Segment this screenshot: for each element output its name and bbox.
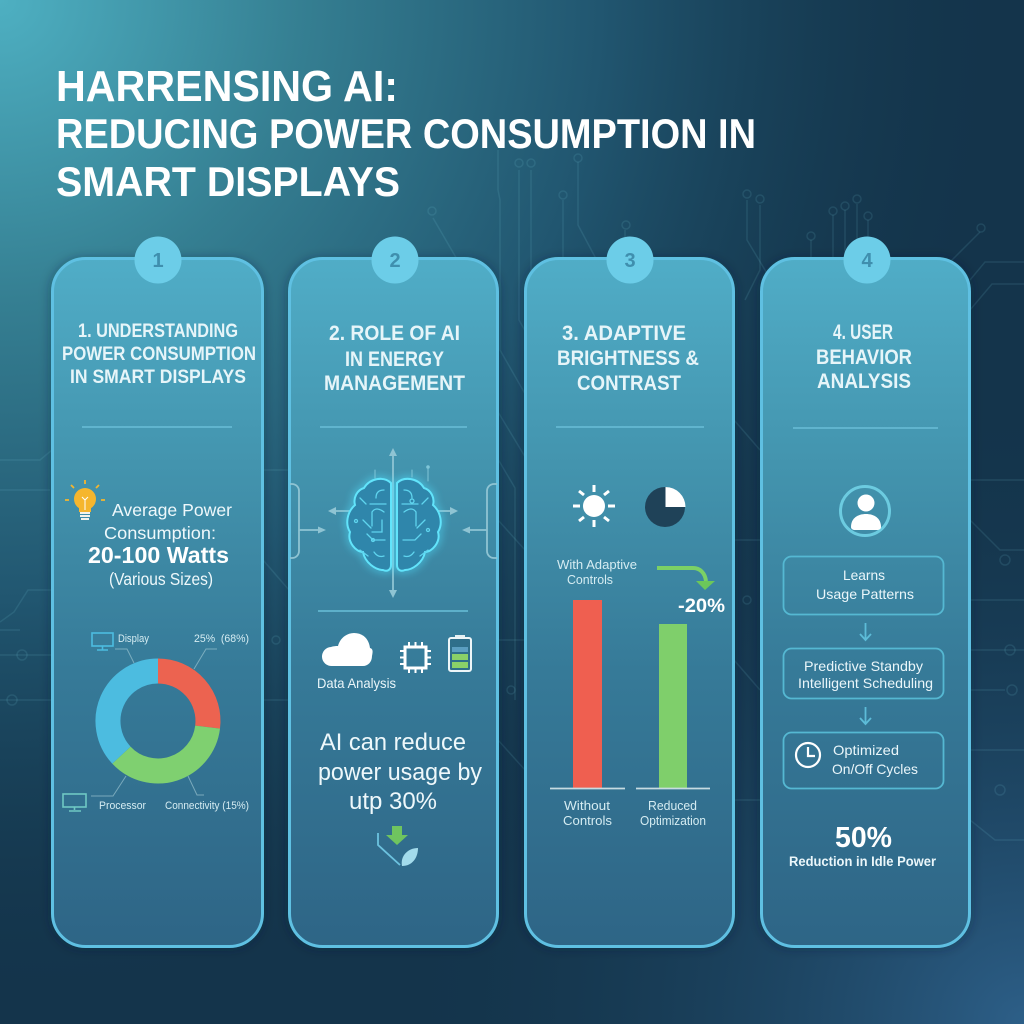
50 percent statistic: Reduction in Idle Power (789, 854, 937, 869)
50 percent statistic: 50% (835, 822, 892, 854)
arrow down (860, 707, 871, 724)
step number 4 (844, 236, 890, 284)
icon: arrow and leaf (378, 826, 418, 866)
heading 2: 2. ROLE OF AI (329, 322, 460, 345)
donut labels and icons: Connectivity (15%) (165, 800, 249, 812)
average power text: Average Power (112, 500, 232, 520)
heading 4: ANALYSIS (817, 370, 911, 393)
icon: sun (573, 485, 615, 527)
panel 3: adaptive brightness (525, 236, 734, 947)
box: predictive standby: Predictive Standby (804, 658, 923, 674)
step number 2: 2 (389, 250, 401, 272)
donut labels and icons (63, 633, 249, 812)
heading 4: BEHAVIOR (816, 346, 912, 369)
step number 3: 3 (624, 250, 636, 272)
box: learns usage patterns (784, 556, 944, 614)
average power text (88, 500, 232, 589)
title: REDUCING POWER CONSUMPTION IN (56, 110, 756, 157)
donut labels and icons: 25% (68%) (194, 633, 249, 645)
box: optimized cycles: Optimized (833, 742, 899, 758)
50 percent statistic (789, 822, 937, 869)
icon: chip (400, 642, 431, 673)
box: predictive standby: Intelligent Scheduling (798, 675, 933, 691)
icon: cloud (322, 633, 373, 666)
step number 2 (372, 236, 418, 284)
icon: user (840, 486, 890, 536)
bar labels: Controls (563, 813, 612, 828)
box: predictive standby (784, 648, 944, 698)
AI reduction statement: power usage by (318, 759, 482, 786)
icon: light bulb (65, 480, 105, 519)
box: optimized cycles (784, 732, 944, 788)
bar labels: Optimization (640, 813, 706, 828)
heading 1 (62, 321, 256, 388)
heading 4: 4. USER (833, 321, 893, 344)
AI reduction statement: utp 30% (349, 788, 437, 815)
AI reduction statement (318, 729, 482, 815)
average power text: Consumption: (104, 523, 216, 543)
panel 2: role of AI (289, 236, 498, 947)
adaptive controls label: With Adaptive (557, 557, 637, 572)
circuit board background pattern (0, 150, 1024, 840)
step number 3 (606, 236, 654, 284)
average power text: 20-100 Watts (88, 542, 229, 568)
heading 1: POWER CONSUMPTION (62, 344, 256, 365)
heading 2 (324, 322, 465, 395)
heading 1: 1. UNDERSTANDING (78, 321, 238, 342)
heading 3: BRIGHTNESS & (557, 347, 699, 370)
adaptive controls label (557, 557, 637, 587)
box: learns usage patterns: Usage Patterns (816, 586, 914, 602)
heading 3 (557, 322, 699, 395)
bar labels: Without (564, 798, 610, 813)
bar labels (563, 798, 706, 828)
title (56, 62, 756, 205)
heading 2: MANAGEMENT (324, 372, 465, 395)
adaptive controls label: Controls (567, 572, 613, 587)
donut chart (108, 671, 208, 771)
heading 1: IN SMART DISPLAYS (70, 367, 246, 388)
heading 4 (816, 321, 912, 393)
step number 1: 1 (152, 250, 164, 272)
icon: contrast pie (645, 487, 686, 527)
icon: clock (796, 743, 820, 767)
box: optimized cycles: On/Off Cycles (832, 761, 918, 777)
AI reduction statement: AI can reduce (320, 729, 466, 756)
title: HARRENSING AI: (56, 62, 398, 111)
heading 3: 3. ADAPTIVE (562, 322, 686, 345)
average power text: (Various Sizes) (109, 569, 213, 589)
data analysis label: Data Analysis (317, 675, 396, 691)
step number 4: 4 (861, 250, 873, 272)
heading 2: IN ENERGY (345, 348, 444, 371)
donut labels and icons: Display (118, 633, 149, 645)
bar labels: Reduced (648, 798, 697, 813)
heading 3: CONTRAST (577, 372, 681, 395)
icon: glowing brain (347, 465, 441, 571)
title: SMART DISPLAYS (56, 158, 400, 205)
minus 20 percent: -20% (678, 596, 725, 617)
arrows around brain (290, 448, 497, 598)
arrow down (860, 623, 871, 640)
bar chart (550, 600, 710, 788)
box: learns usage patterns: Learns (843, 567, 885, 583)
donut labels and icons: Processor (99, 800, 146, 812)
green arrow (657, 568, 715, 590)
panel 1: understanding power consumption (52, 236, 262, 947)
panel 4: user behavior (761, 236, 970, 947)
step number 1 (134, 236, 182, 284)
icon: battery (449, 635, 471, 671)
